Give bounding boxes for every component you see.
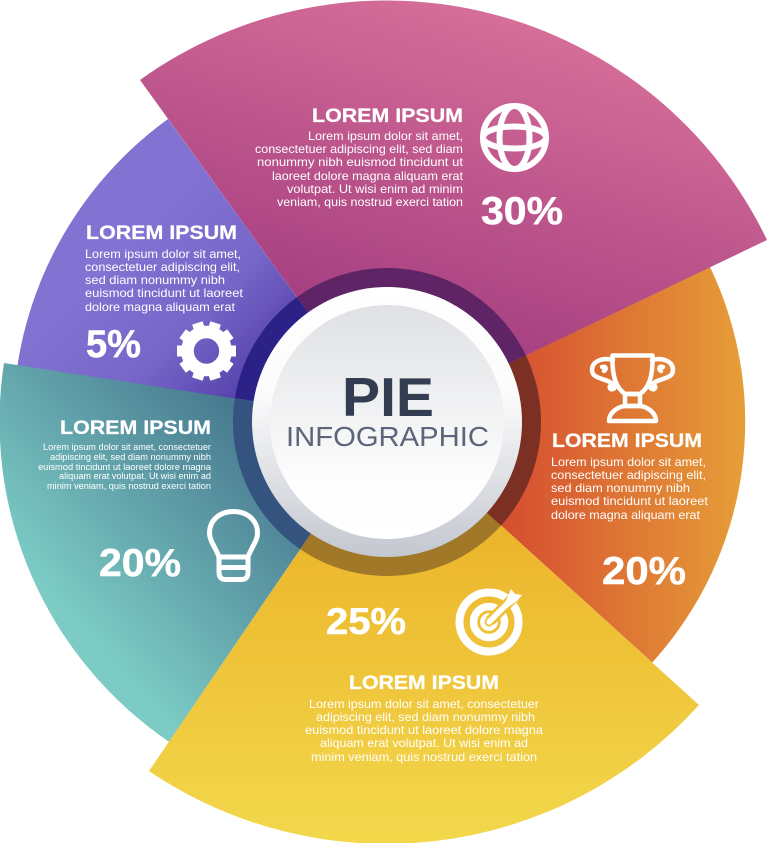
body text: euismod tincidunt ut laoreet dolore magna (305, 724, 544, 737)
body text (551, 456, 709, 522)
percentage: 20% (602, 550, 686, 593)
wedge: teal 20% (0, 363, 387, 742)
percentage: 25% (326, 601, 406, 642)
heading: LOREM IPSUM (60, 417, 211, 439)
body text (85, 248, 244, 314)
percentage: 20% (99, 542, 181, 585)
body text: Lorem ipsum dolor sit amet, (551, 456, 706, 469)
panel: teal 20% (38, 417, 258, 585)
body text: Lorem ipsum dolor sit amet, (85, 248, 241, 261)
body text: adipiscing elit, sed diam nonummy nibh (316, 711, 535, 724)
icon: light bulb (210, 512, 258, 580)
heading: LOREM IPSUM (349, 672, 499, 694)
body text: aliquam erat volutpat. Ut wisi enim ad (320, 737, 528, 750)
body text: dolore magna aliquam erat (551, 509, 701, 522)
heading: LOREM IPSUM (86, 222, 237, 244)
icon: trophy (592, 356, 673, 421)
body text: consectetuer adipiscing elit, (85, 261, 240, 274)
hub subtitle: INFOGRAPHIC: INFOGRAPHIC (286, 421, 489, 452)
body text: euismod tincidunt ut laoreet dolore magna (38, 462, 211, 472)
icon: globe (483, 106, 546, 169)
body text: Lorem ipsum dolor sit amet, consectetuer (43, 442, 211, 452)
wedge: pink 30% (140, 1, 767, 422)
body text: euismod tincidunt ut laoreet (85, 287, 244, 300)
body text: consectetuer adipiscing elit, sed diam (255, 143, 463, 156)
body text: adipiscing elit, sed diam nonummy nibh (50, 452, 211, 462)
wedge: orange 20% (387, 267, 745, 662)
hub title: PIE: PIE (342, 366, 434, 428)
body text: sed diam nonummy nibh (85, 274, 225, 287)
body text: nonummy nibh euismod tincidunt ut (257, 156, 464, 169)
percentage: 5% (86, 323, 141, 366)
panel: blue 5% (85, 222, 244, 381)
body text: Lorem ipsum dolor sit amet, consectetuer (309, 698, 539, 711)
body text: euismod tincidunt ut laoreet (551, 495, 709, 508)
body text: veniam, quis nostrud exerci tation (277, 196, 463, 209)
body text: Lorem ipsum dolor sit amet, (308, 130, 463, 143)
center hub (252, 287, 522, 557)
body text: aliquam erat volutpat. Ut wisi enim ad (59, 471, 211, 481)
body text (255, 130, 464, 209)
body text: sed diam nonummy nibh (551, 482, 690, 495)
body text: minim veniam, quis nostrud exerci tation (311, 751, 537, 764)
wedge: blue 5% (15, 119, 387, 422)
body text: volutpat. Ut wisi enim ad minim (287, 183, 463, 196)
body text: consectetuer adipiscing elit, (551, 469, 706, 482)
panel: orange 20% (551, 356, 709, 593)
percentage: 30% (481, 190, 563, 233)
panel: pink 30% (255, 105, 563, 233)
body text (38, 442, 211, 491)
icon: target (460, 589, 522, 652)
panel: yellow 25% (305, 589, 544, 764)
heading: LOREM IPSUM (312, 105, 463, 127)
body text: minim veniam, quis nostrud exerci tation (47, 481, 211, 491)
body text: dolore magna aliquam erat (85, 301, 236, 314)
body text: laoreet dolore magna aliquam erat (272, 170, 464, 183)
heading: LOREM IPSUM (552, 430, 702, 452)
wedge: yellow 25% (149, 422, 699, 843)
dark ring around hub (233, 268, 541, 576)
icon: gear (177, 321, 236, 381)
body text (305, 698, 544, 764)
